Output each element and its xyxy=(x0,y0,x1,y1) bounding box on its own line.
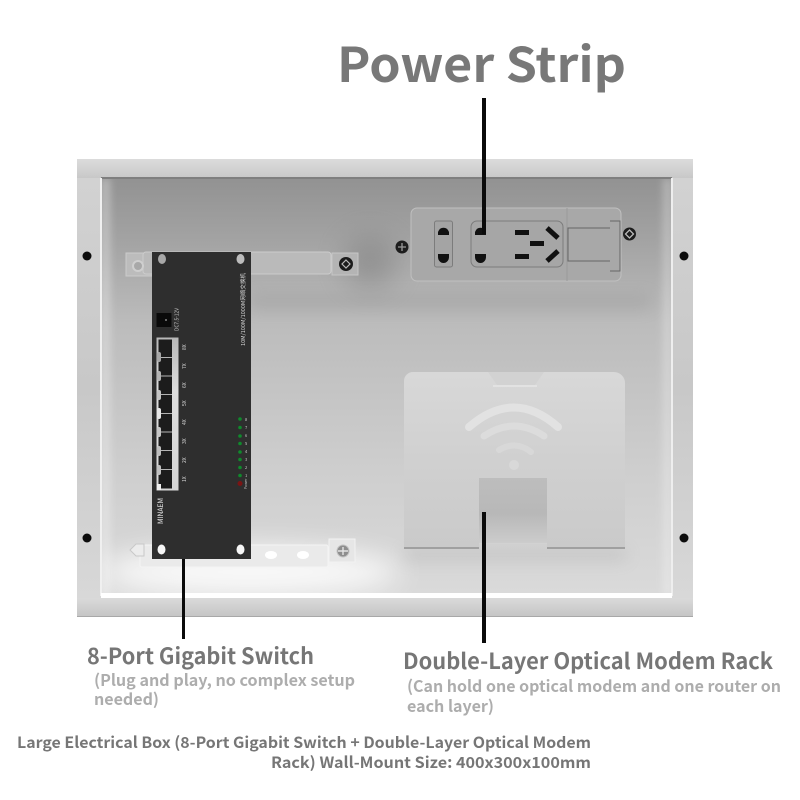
status LEDs: 2 xyxy=(245,465,248,471)
text: product description xyxy=(17,731,591,773)
status LEDs: 1 xyxy=(245,473,247,479)
port labels: 3X xyxy=(181,438,188,444)
label: 8-port gigabit switch: 8-Port Gigabit Switch xyxy=(87,639,314,671)
port labels: 4X xyxy=(181,419,188,425)
text: switch note: needed) xyxy=(94,686,159,710)
status LEDs: 6 xyxy=(245,433,248,439)
power strip xyxy=(396,208,636,281)
model label: 10M/100M/1000M网络交换机 xyxy=(239,273,247,346)
double-layer optical modem rack xyxy=(404,372,625,549)
port labels: 7X xyxy=(181,363,188,369)
brand label: MINAEM xyxy=(155,498,166,524)
arrow: modem rack leader xyxy=(482,512,486,643)
ethernet ports xyxy=(156,338,178,490)
port labels: 6X xyxy=(181,382,188,388)
power jack: DC7.5-12V xyxy=(172,307,180,331)
text: modem rack note xyxy=(407,673,781,717)
status LEDs: 3 xyxy=(245,457,247,463)
left screw xyxy=(396,240,408,254)
title: Power Strip xyxy=(337,26,626,96)
port labels: 2X xyxy=(181,457,188,463)
status LEDs: Power xyxy=(244,478,249,489)
top mounting bracket xyxy=(126,252,358,276)
text: product description: Large Electrical Box (8-Port Gigabit Switch + Double-Layer Optical Modem xyxy=(17,731,591,753)
text: product description: Rack) Wall-Mount Size: 400x300x100mm xyxy=(271,751,591,773)
status LEDs: 8 xyxy=(245,417,248,423)
multi-pin socket xyxy=(471,221,563,267)
port labels: 1X xyxy=(181,476,188,482)
bottom mounting bracket xyxy=(130,539,355,567)
rack cutout xyxy=(479,478,547,543)
text: modem rack note: (Can hold one optical modem and one router on xyxy=(407,673,781,697)
switch cover xyxy=(568,221,620,271)
text: switch note xyxy=(94,667,355,710)
status LEDs: 4 xyxy=(245,449,248,455)
status LEDs: 7 xyxy=(245,425,248,431)
status LEDs xyxy=(238,417,249,489)
right screw xyxy=(623,228,636,240)
text: modem rack note: each layer) xyxy=(407,693,494,717)
text: switch note: (Plug and play, no complex setup xyxy=(94,667,355,691)
port labels: 8X xyxy=(181,344,188,350)
8-port gigabit switch xyxy=(152,252,251,559)
electrical box xyxy=(77,159,693,617)
arrow: power strip leader xyxy=(482,98,486,234)
power jack xyxy=(156,307,180,331)
wifi symbol xyxy=(469,408,558,470)
port labels: 5X xyxy=(181,400,188,406)
two-pin socket xyxy=(434,221,452,267)
port labels xyxy=(181,344,188,482)
arrow: switch leader xyxy=(182,559,185,639)
status LEDs: 5 xyxy=(245,441,247,447)
label: double-layer optical modem rack: Double-Layer Optical Modem Rack xyxy=(403,644,774,676)
